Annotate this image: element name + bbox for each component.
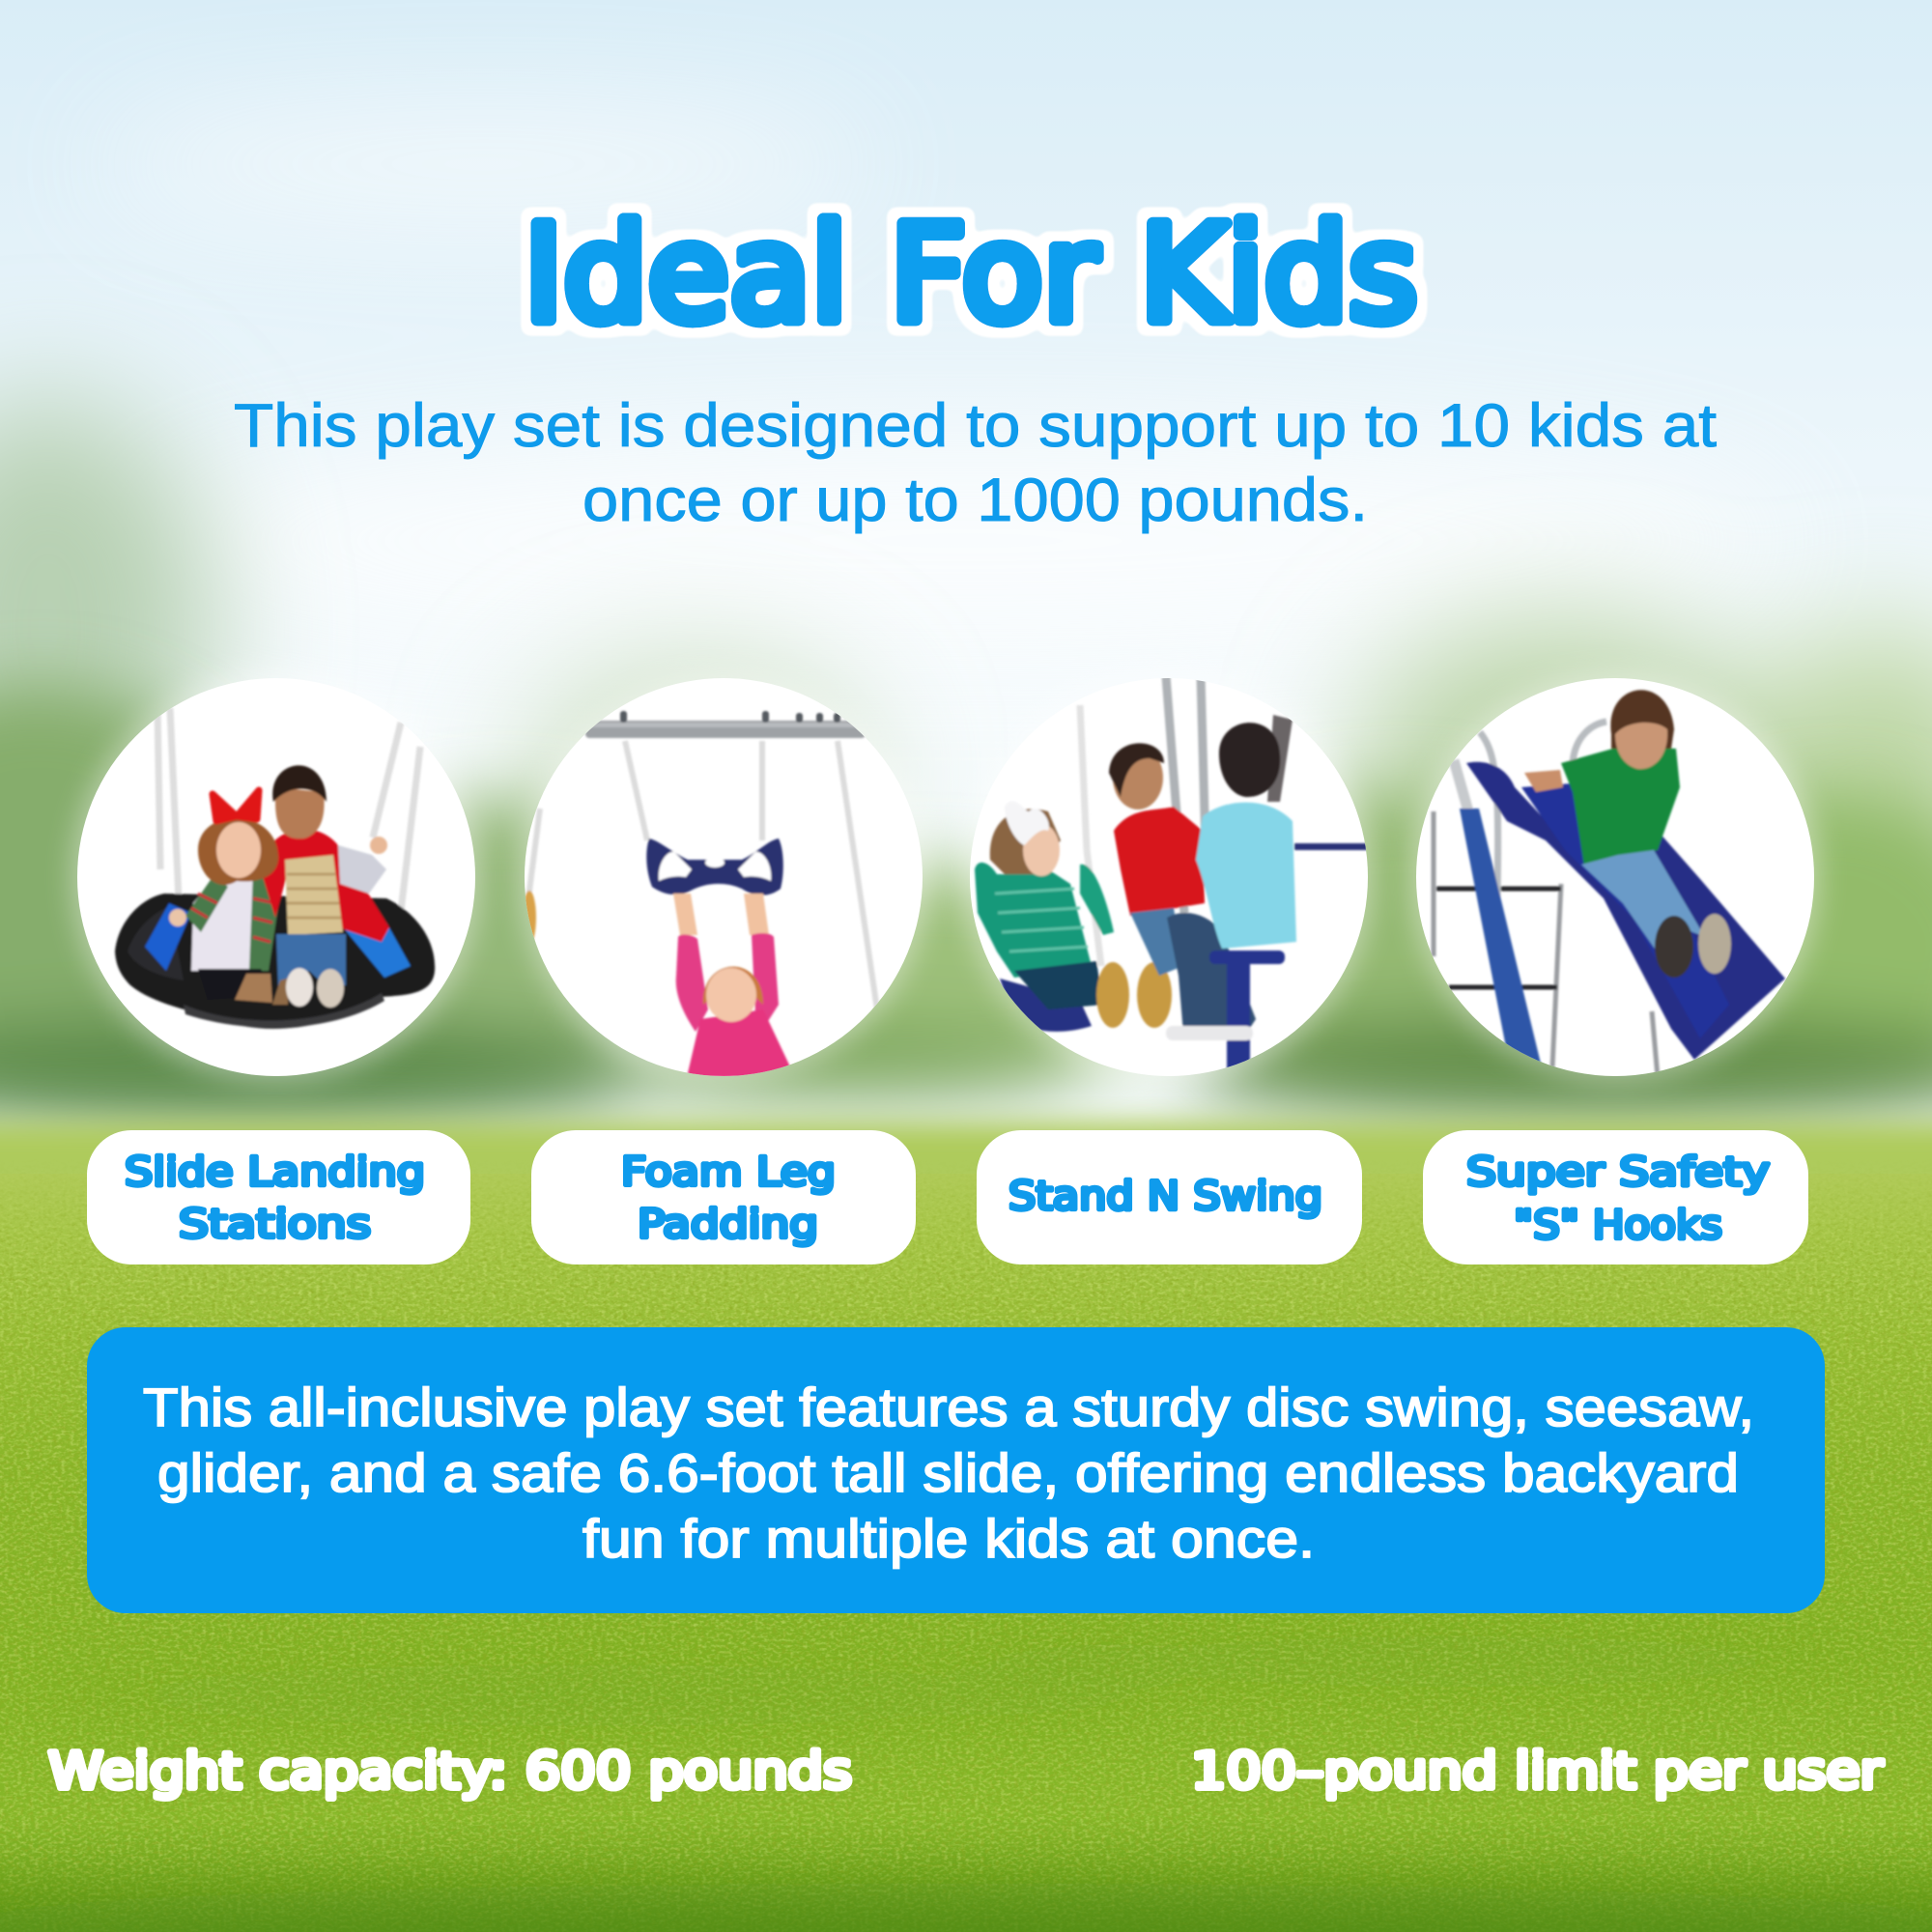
label: Super Safety S Hooks: Super Safety [1466, 1149, 1770, 1195]
panel: description: fun for multiple kids at once. [582, 1508, 1315, 1569]
photo circle: stand n swing [964, 672, 1374, 1082]
subtitle text: This play set is designed to support up to 10 kids at [234, 392, 1718, 460]
label: Stand N Swing: Stand N Swing [1009, 1173, 1322, 1219]
label: Super Safety S Hooks: "S" Hooks [1514, 1202, 1722, 1248]
panel: description: This all-inclusive play set features a sturdy disc swing, seesaw, [143, 1377, 1754, 1437]
subtitle text: once or up to 1000 pounds. [582, 467, 1368, 534]
photo circle: slide [1410, 672, 1820, 1082]
weight capacity note: Weight capacity: 600 pounds [48, 1743, 852, 1801]
panel: description [87, 1327, 1825, 1613]
photo circle: trapeze bar [519, 672, 928, 1082]
subtitle text [234, 392, 1718, 534]
label: Stand N Swing [977, 1130, 1362, 1264]
label: Super Safety S Hooks [1423, 1130, 1808, 1264]
user limit note: 100–pound limit per user [1191, 1743, 1884, 1801]
label: Slide Landing Stations [87, 1130, 470, 1264]
panel: description: glider, and a safe 6.6-foot tall slide, offering endless backyard [157, 1442, 1739, 1503]
title: Ideal For Kids: Ideal For Kids [524, 198, 1418, 352]
label: Slide Landing Stations: Stations [179, 1201, 371, 1247]
label: Slide Landing Stations: Slide Landing [125, 1149, 425, 1195]
photo circle: disc swing [71, 672, 481, 1082]
label: Foam Leg Padding: Foam Leg [621, 1149, 836, 1195]
label: Foam Leg Padding [531, 1130, 916, 1264]
label: Foam Leg Padding: Padding [638, 1201, 818, 1247]
